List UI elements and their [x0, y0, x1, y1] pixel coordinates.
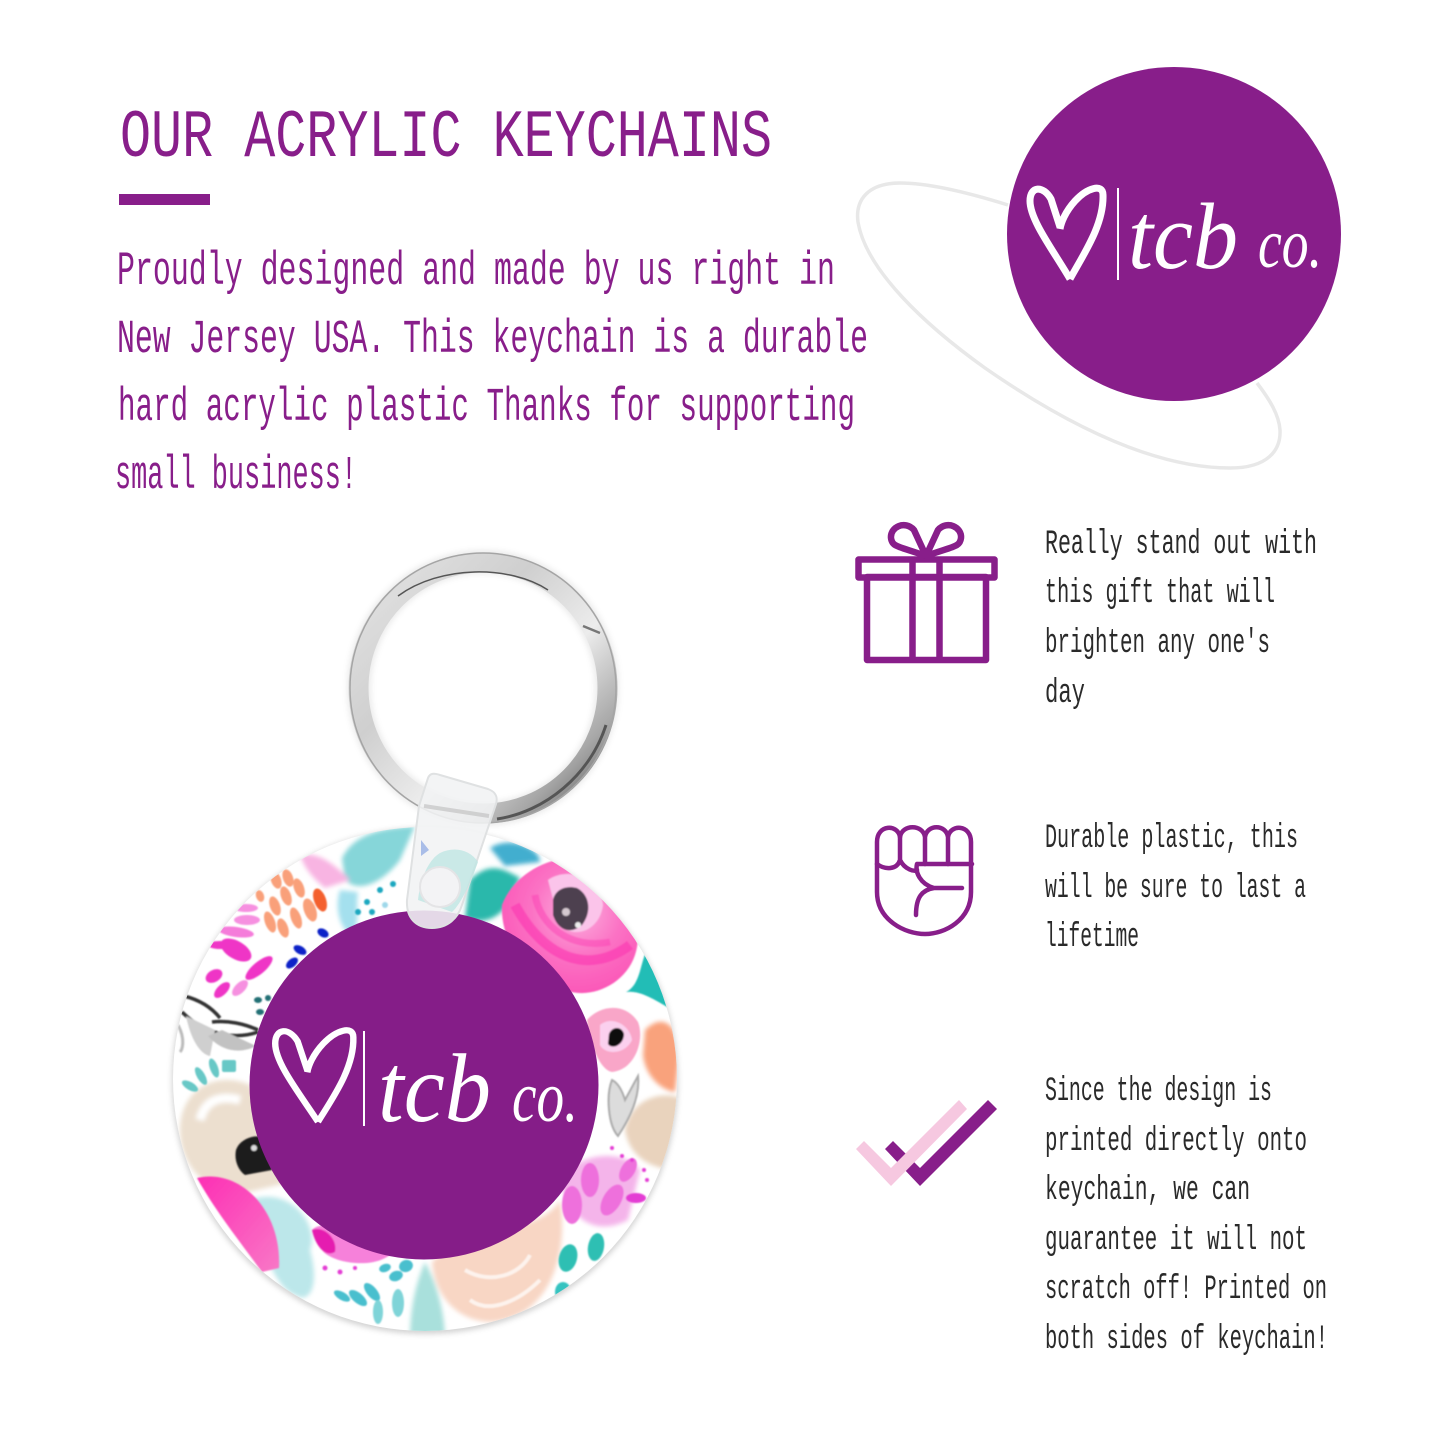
- title underline: [119, 194, 210, 205]
- feature text: gift: brighten any one's: [1045, 625, 1270, 663]
- intro paragraph: hard acrylic plastic Thanks for supporting: [118, 382, 855, 435]
- icon: double check marks: [856, 1100, 997, 1186]
- intro paragraph: small business!: [115, 450, 357, 503]
- gray leaves: [182, 996, 258, 1036]
- feature text: gift: day: [1045, 675, 1085, 713]
- feature text: durable: [1045, 820, 1306, 957]
- feature text: print: Since the design is: [1045, 1073, 1272, 1111]
- logo wordmark tcb: tcb: [1128, 185, 1238, 289]
- icon: fist: [877, 827, 972, 934]
- plastic strap: [407, 774, 497, 928]
- intro paragraph: Proudly designed and made by us right in: [117, 246, 835, 299]
- purple logo circle: [250, 910, 598, 1260]
- bottom teal and blue strokes: [332, 1232, 606, 1324]
- watercolor floral pattern: [178, 826, 680, 1340]
- icon: keychain logo heart: [275, 1030, 353, 1122]
- keychain logo wordmark co.: co.: [512, 1057, 578, 1137]
- title: OUR ACRYLIC KEYCHAINS: [120, 100, 772, 177]
- magenta strokes: [203, 904, 276, 1001]
- icon: logo heart: [1030, 188, 1103, 279]
- rivet: [420, 867, 460, 907]
- blue dashes: [284, 927, 330, 971]
- intro paragraph: [115, 246, 868, 503]
- orange dashes: [254, 868, 330, 939]
- intro paragraph: New Jersey USA. This keychain is a durable: [117, 314, 868, 367]
- pink rose: [502, 857, 638, 993]
- feature text: gift: this gift that will: [1045, 575, 1275, 613]
- teal ticks: [180, 881, 396, 1094]
- feature text: gift: [1045, 526, 1317, 713]
- keychain disc: [173, 827, 677, 1331]
- keychain logo divider: [363, 1031, 365, 1126]
- infographic canvas: [117, 67, 1341, 1355]
- feature text: durable: lifetime: [1045, 919, 1139, 957]
- icon: gift box: [858, 525, 994, 660]
- keychain logo wordmark tcb: tcb: [378, 1035, 491, 1143]
- feature text: print: [1045, 1073, 1328, 1359]
- feature text: print: keychain, we can: [1045, 1172, 1250, 1210]
- logo badge: [1007, 67, 1341, 401]
- key ring: [350, 553, 616, 823]
- disc shadow: [172, 828, 678, 1334]
- logo divider: [1117, 188, 1119, 280]
- logo wordmark co.: co.: [1258, 206, 1322, 283]
- keychain illustration: [172, 553, 680, 1340]
- decorative orbit outline: [858, 183, 1280, 468]
